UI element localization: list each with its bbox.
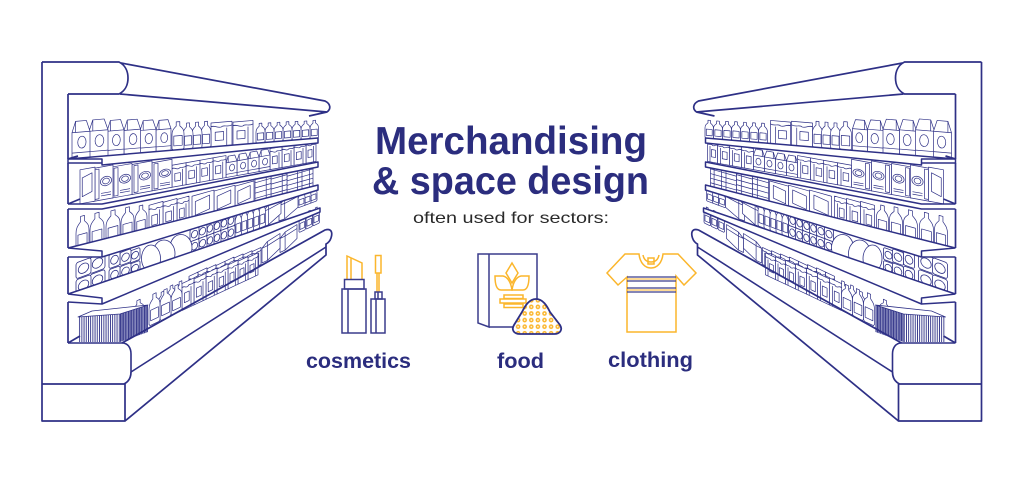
products: bottom shelf xyxy=(133,206,320,334)
shelf unit: right (mirrored) xyxy=(692,62,982,421)
shelf unit: left xyxy=(42,62,332,421)
products: second shelf xyxy=(80,127,316,204)
base deck xyxy=(68,247,326,372)
shelf boards xyxy=(68,138,320,304)
products: top shelf xyxy=(72,101,318,159)
shelf edge rail xyxy=(122,229,332,421)
icon: clothing xyxy=(607,254,696,332)
products: fourth shelf xyxy=(76,174,317,296)
outer frame xyxy=(42,62,125,421)
multipack block xyxy=(78,305,148,342)
icon: cosmetics xyxy=(342,256,385,333)
title: Merchandising xyxy=(375,120,647,163)
products: third shelf xyxy=(76,151,313,254)
icon: food xyxy=(478,254,561,334)
subtitle: often used for sectors: xyxy=(413,210,609,227)
inner back wall xyxy=(68,94,80,343)
hood xyxy=(42,62,330,116)
title xyxy=(372,120,649,203)
title: & space design xyxy=(372,160,649,203)
label: food: food xyxy=(497,350,544,373)
label: clothing: clothing xyxy=(608,349,693,372)
label: cosmetics: cosmetics xyxy=(306,350,411,373)
plates xyxy=(142,234,192,272)
